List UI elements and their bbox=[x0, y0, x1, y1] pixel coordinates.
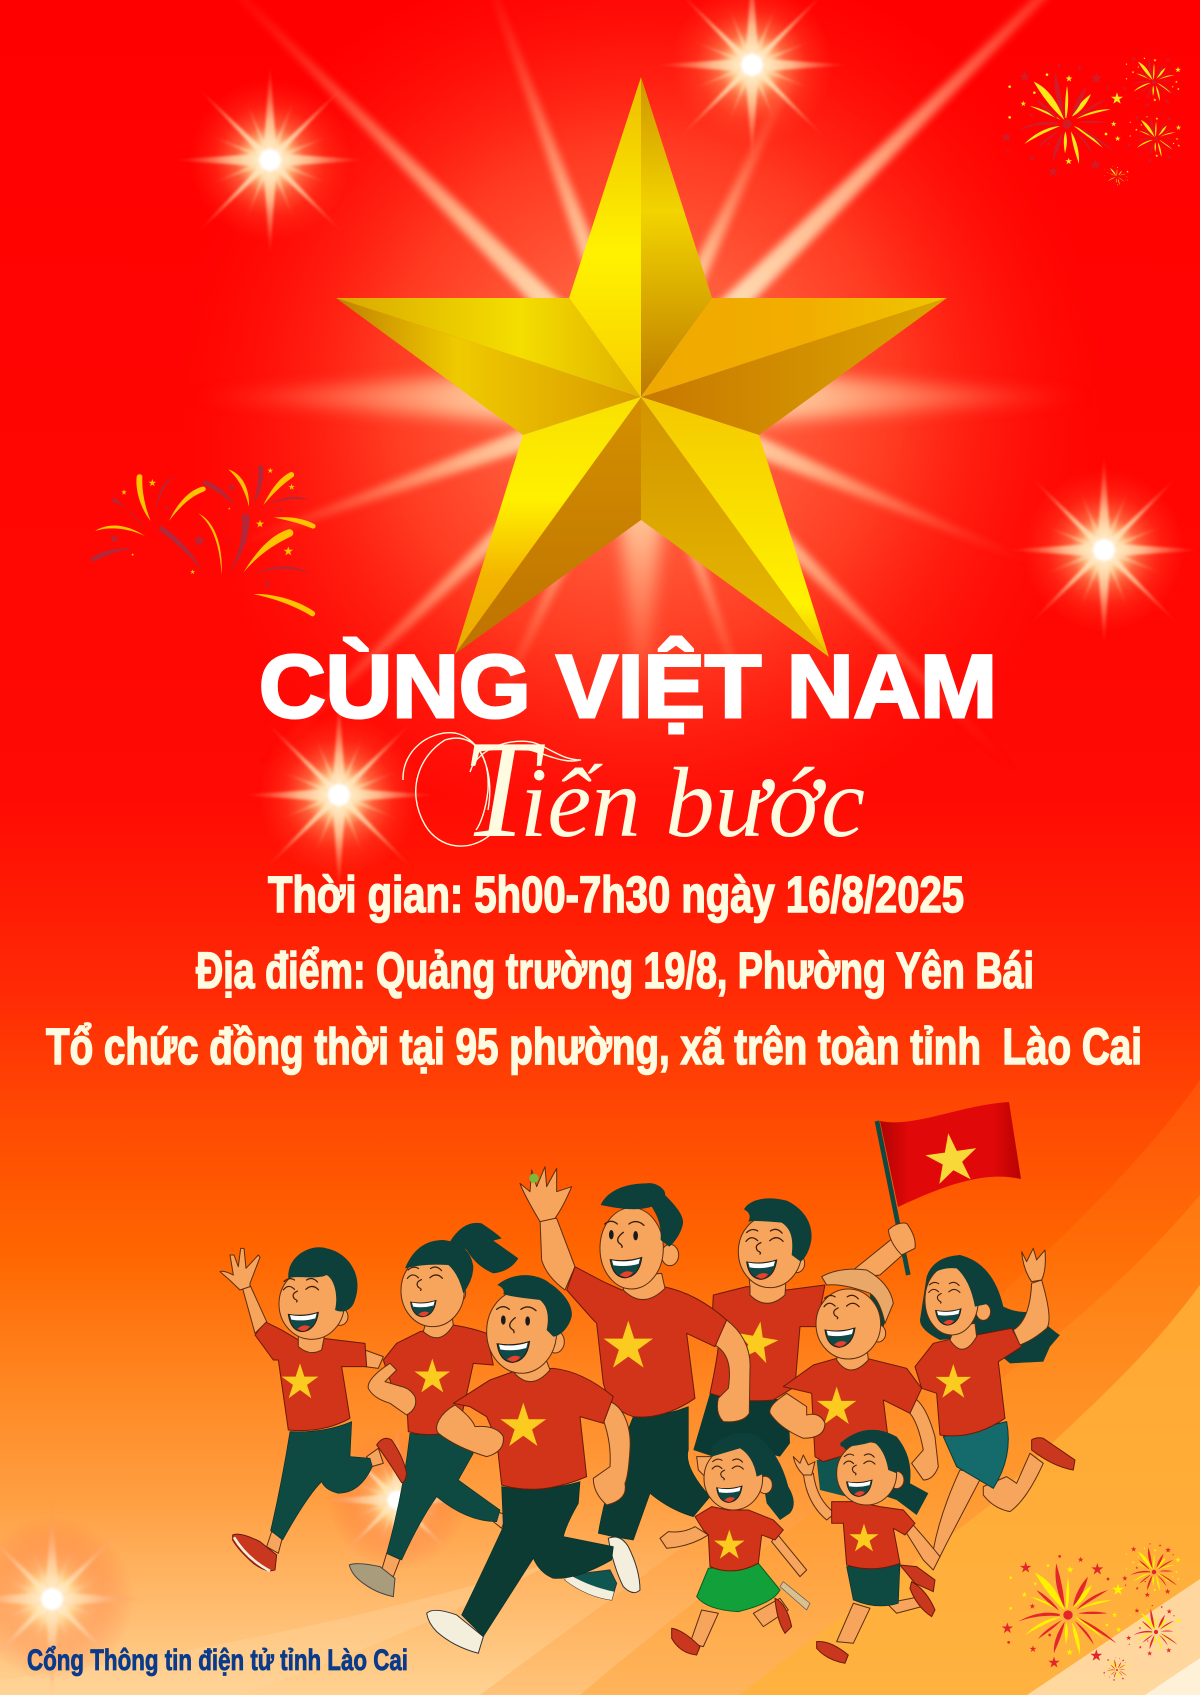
decorative swooshes bottom right bbox=[0, 1080, 1200, 1695]
person with ponytail bbox=[349, 1223, 518, 1597]
person with flag bbox=[693, 1121, 915, 1478]
girl with long hair bbox=[915, 1248, 1075, 1557]
flag bbox=[880, 1102, 1021, 1207]
script subtitle: iến bước bbox=[520, 747, 865, 858]
title: CÙNG VIỆT NAM bbox=[259, 636, 997, 736]
tall person raising hand bbox=[520, 1167, 750, 1540]
person waving left bbox=[220, 1247, 407, 1571]
person with hat bbox=[770, 1269, 938, 1497]
script subtitle: T bbox=[462, 712, 546, 867]
child with green skirt bbox=[660, 1433, 810, 1655]
event details bbox=[46, 866, 1142, 1075]
central light burst behind star bbox=[179, 0, 1200, 857]
footer credit: Cổng Thông tin điện tử tỉnh Lào Cai bbox=[27, 1644, 408, 1677]
fireworks top right bbox=[1001, 53, 1181, 188]
script subtitle bbox=[403, 712, 865, 867]
golden star bbox=[336, 77, 947, 657]
front runner bbox=[427, 1275, 640, 1653]
people running bbox=[220, 1121, 1075, 1663]
fireworks bottom right bbox=[1002, 1543, 1181, 1681]
child waving bbox=[793, 1430, 940, 1663]
time line: Thời gian: 5h00-7h30 ngày 16/8/2025 bbox=[268, 866, 964, 923]
fireworks left bbox=[91, 465, 316, 616]
